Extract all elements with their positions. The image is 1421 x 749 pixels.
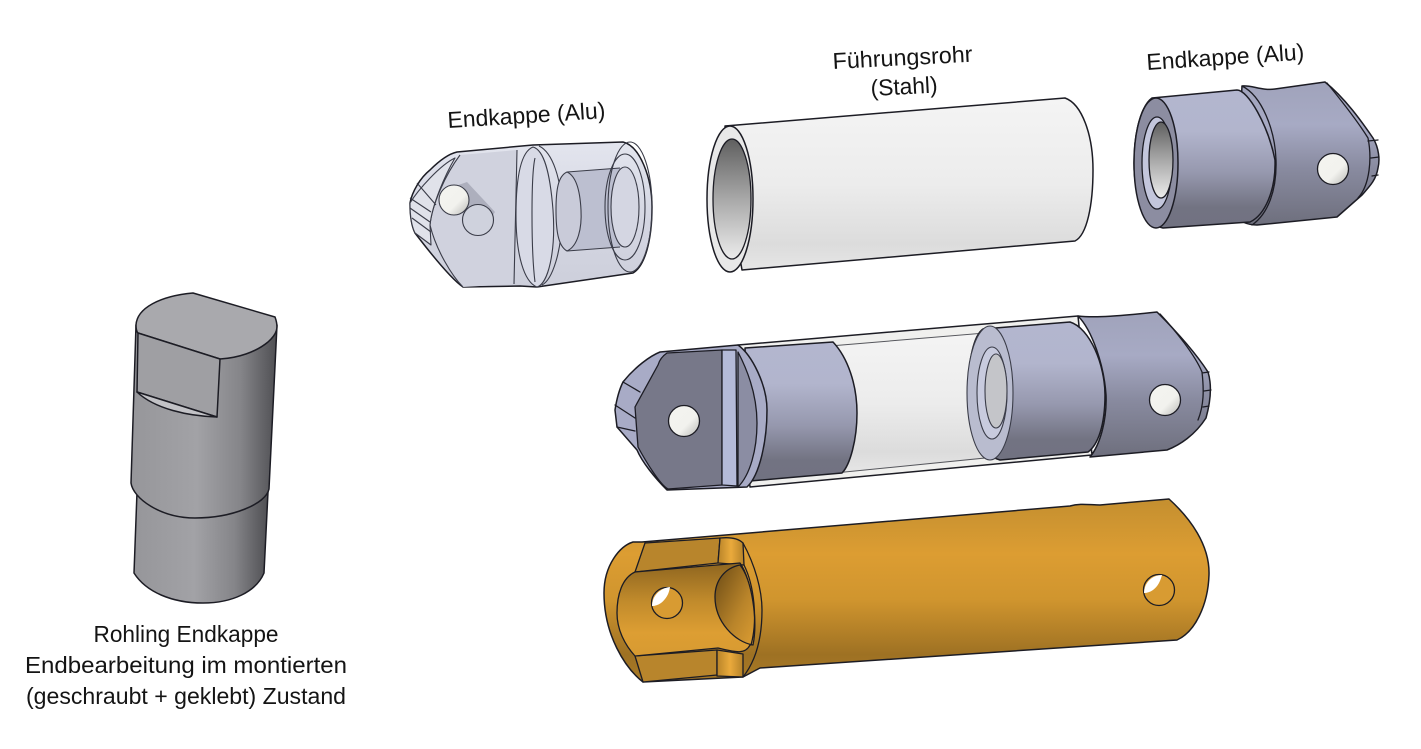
glass cap bore rings <box>608 142 652 272</box>
glass cap ring <box>516 147 554 287</box>
orange socket <box>715 565 755 645</box>
assembly right cap facets <box>1160 314 1211 420</box>
part: solid end cap <box>1134 82 1379 228</box>
label: guide tube <box>832 41 973 101</box>
label: blank caption: Rohling Endkappe <box>94 621 278 647</box>
label: guide tube: (Stahl) <box>870 72 938 101</box>
assembly left cap face <box>635 350 722 489</box>
cap head <box>1235 82 1379 225</box>
glass cap outline <box>410 142 652 287</box>
assembly right shaft end <box>967 326 1013 460</box>
glass cap tip facets <box>410 158 455 245</box>
tube body <box>725 98 1093 270</box>
orange left hole <box>652 588 682 618</box>
orange top fillet <box>718 538 744 565</box>
blank upper body <box>131 325 277 518</box>
glass cap inner bore <box>556 168 638 251</box>
orange right hole <box>1144 574 1174 606</box>
label: guide tube: Führungsrohr <box>832 41 973 74</box>
blank lower cylinder <box>134 492 268 603</box>
assembly tube inner <box>830 333 985 473</box>
orange body <box>604 499 1209 682</box>
label: blank caption <box>25 621 347 709</box>
cap shaft <box>1134 90 1275 228</box>
assembly right shaft <box>968 322 1105 460</box>
glass cap flat face <box>430 150 517 287</box>
assembly left shaft <box>745 342 857 481</box>
tube end ring <box>707 126 753 272</box>
glass cap cross hole <box>447 182 495 236</box>
label: end cap right: Endkappe (Alu) <box>1146 39 1305 75</box>
orange bottom flat <box>635 650 717 682</box>
assembly right cap <box>1078 312 1210 457</box>
cap cross hole <box>1318 154 1348 184</box>
assembly glass tube <box>738 316 1092 487</box>
orange rim arcs <box>743 543 762 677</box>
cap flange arc <box>1242 86 1276 225</box>
blank top face <box>136 293 277 359</box>
orange bore surface <box>617 563 753 656</box>
assembly left cap <box>615 345 767 490</box>
assembly left cap facet lines <box>615 382 640 431</box>
part: steel guide tube <box>707 98 1093 272</box>
cap end face <box>1134 98 1178 228</box>
assembly left cap segment <box>738 352 757 487</box>
part: blank end cap (Rohling) <box>131 293 277 603</box>
part: orange machined result <box>604 499 1209 682</box>
assembly right cross hole <box>1150 384 1180 416</box>
label: end cap left: Endkappe (Alu) <box>447 97 606 133</box>
blank notch crescent <box>137 392 217 417</box>
orange bottom fillet <box>717 650 743 677</box>
part: transparent end cap <box>410 142 652 287</box>
cap chamfer facets <box>1327 83 1379 198</box>
blank notch face <box>137 333 220 417</box>
label: blank caption: (geschraubt + geklebt) Zustand <box>26 683 346 709</box>
part: assembled transparent view <box>615 312 1211 490</box>
orange top flat <box>635 538 720 572</box>
tube bore <box>713 139 751 259</box>
assembly left cross hole <box>668 406 700 436</box>
assembly left cap channel <box>722 350 737 486</box>
label: blank caption: Endbearbeitung im montierten <box>25 652 347 678</box>
cap bore <box>1142 117 1172 209</box>
